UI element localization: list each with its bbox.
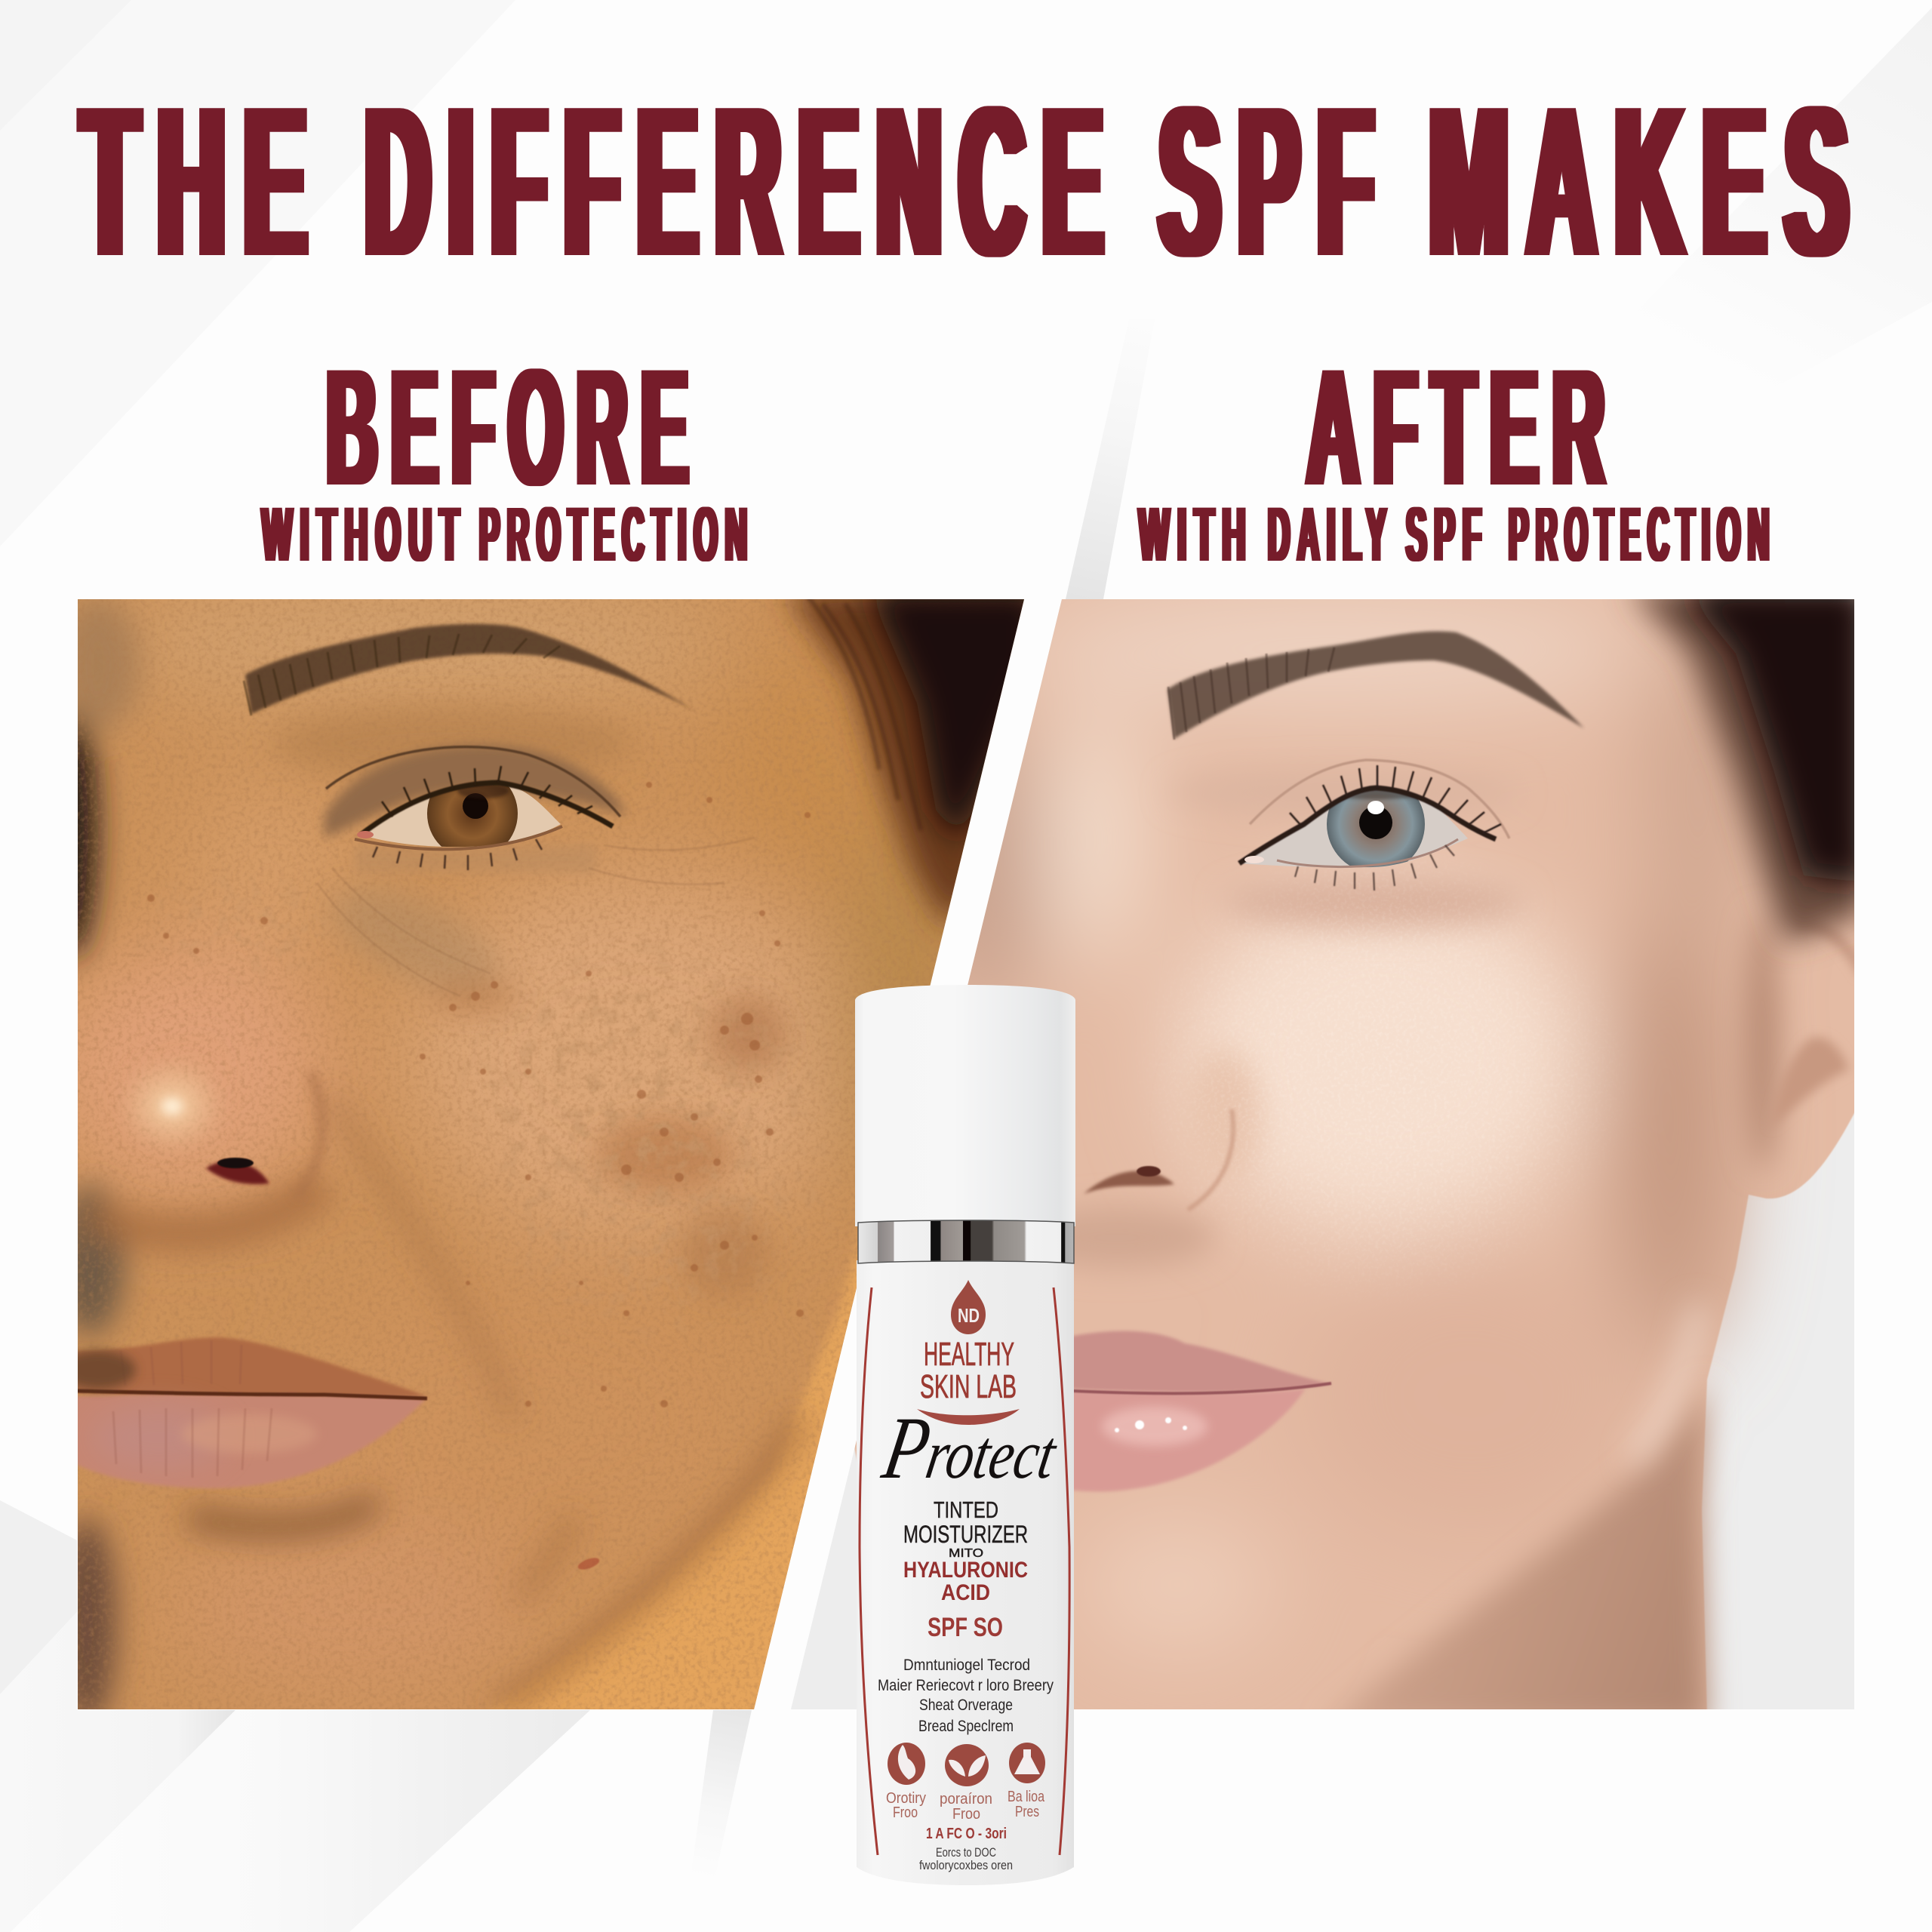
- nose contour and nostril: [1084, 1109, 1233, 1210]
- panel: after photo, protected face: [785, 589, 1864, 1728]
- claims: Bread Speclrem: [918, 1718, 1014, 1735]
- claims: Sheat Orverage: [919, 1697, 1013, 1714]
- panel: before photo, sun-damaged face: [45, 574, 1041, 1728]
- text: BEFORE: [327, 334, 702, 520]
- product name script: Protect: [876, 1398, 1066, 1497]
- free-from labels: Froo: [893, 1804, 918, 1821]
- logo drop: [951, 1280, 986, 1334]
- icon: leaves badge: [945, 1744, 989, 1786]
- after subheading: SPF: [1406, 491, 1489, 577]
- neck: [1324, 1380, 1707, 1728]
- hyaluronic acid: HYALURONIC: [903, 1558, 1028, 1583]
- eye: [1239, 760, 1509, 891]
- lips: [60, 1337, 427, 1488]
- after subheading: WITH: [1139, 491, 1254, 577]
- eyebrow: [1168, 632, 1584, 740]
- swoosh: [917, 1409, 1020, 1425]
- bottle: shadow: [855, 1872, 1075, 1892]
- free-from labels: Froo: [952, 1806, 980, 1823]
- hair: [1630, 589, 1864, 943]
- after subheading: [1139, 491, 1777, 577]
- bottle cap: [855, 985, 1075, 1226]
- ear: [1770, 924, 1864, 1128]
- icon: flask badge: [1009, 1743, 1045, 1783]
- brand name: [920, 1336, 1017, 1405]
- free-from labels: Ba lioa: [1008, 1789, 1045, 1805]
- hyaluronic acid: ACID: [941, 1580, 990, 1605]
- metallic ring: [858, 1220, 1074, 1263]
- after subheading: DAILY: [1268, 491, 1394, 577]
- jaw highlight: [1634, 1306, 1698, 1460]
- brand name: SKIN LAB: [920, 1368, 1017, 1405]
- volume: 1 A FC O - 3ori: [926, 1826, 1007, 1842]
- claims: Maier Reriecovt r loro Breery: [878, 1677, 1054, 1694]
- lips: [1057, 1331, 1331, 1492]
- pigment mottling: [498, 966, 791, 1276]
- neck: [493, 1239, 857, 1709]
- label border lines: [860, 1287, 1069, 1855]
- spf value: SPF SO: [928, 1613, 1003, 1642]
- heading: after: [1139, 334, 1777, 577]
- title: THE: [82, 62, 325, 300]
- free-from labels: Orotiry: [886, 1790, 926, 1807]
- product bottle: [855, 985, 1075, 1885]
- skin grain: [78, 599, 1024, 1709]
- brand name: HEALTHY: [924, 1336, 1014, 1373]
- eye socket and eye: [317, 746, 755, 996]
- heading: before: [262, 334, 755, 577]
- icon: feather badge: [888, 1743, 925, 1785]
- claims: [878, 1657, 1054, 1735]
- hair: [785, 589, 1041, 928]
- fine print: fwolorycoxbes oren: [919, 1858, 1013, 1872]
- product description: TINTED: [934, 1497, 998, 1523]
- free-from labels: Pres: [1015, 1804, 1039, 1820]
- claims: Dmntuniogel Tecrod: [903, 1657, 1030, 1674]
- face shape: [823, 589, 1864, 1717]
- product description: [903, 1497, 1028, 1560]
- fine print: Eorcs to DOC: [936, 1845, 996, 1860]
- fine print: [919, 1845, 1013, 1872]
- product description: MOISTURIZER: [903, 1521, 1028, 1548]
- hyaluronic acid: [903, 1558, 1028, 1605]
- free-from labels: [886, 1789, 1045, 1823]
- free-from labels: poraíron: [940, 1791, 992, 1807]
- bottle body: [857, 1260, 1074, 1885]
- age spots: [147, 782, 811, 1572]
- title: SPF: [1159, 62, 1392, 300]
- text: PROTECTION: [479, 491, 755, 577]
- eyebrow: [244, 624, 694, 715]
- product description: MITO: [949, 1547, 983, 1560]
- skin grain: [1094, 792, 1668, 1351]
- before subheading: WITHOUT: [262, 491, 467, 577]
- nose highlight and nostril: [138, 1072, 322, 1196]
- logo drop: ND: [958, 1304, 980, 1327]
